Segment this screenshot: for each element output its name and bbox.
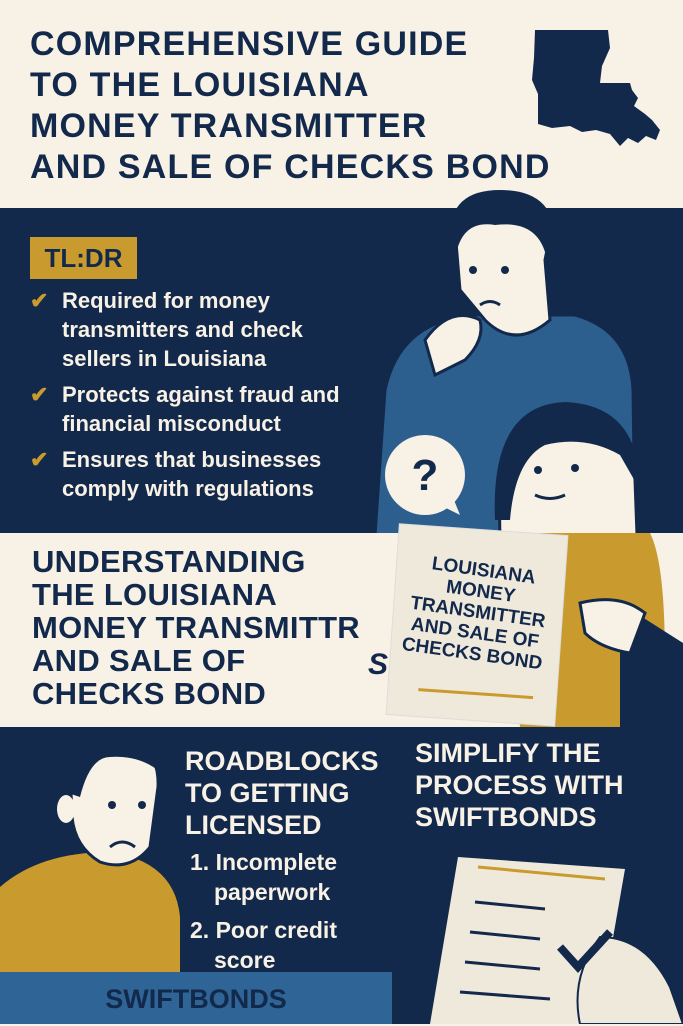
document: bond — [387, 524, 567, 726]
heading: understanding: UNDERSTANDING — [32, 544, 306, 579]
illustration: woman sweater and hand — [520, 533, 683, 727]
heading: roadblocks — [185, 746, 378, 840]
title: COMPREHENSIVE GUIDE — [30, 25, 468, 63]
icon: question bubble: ? — [412, 451, 438, 500]
title: MONEY TRANSMITTER — [30, 107, 428, 145]
title: AND SALE OF CHECKS BOND — [30, 148, 551, 186]
heading: understanding — [32, 544, 360, 711]
heading: simplify: PROCESS WITH — [415, 770, 624, 800]
heading: simplify: SWIFTBONDS — [415, 802, 596, 832]
panel: roadblocks — [0, 727, 683, 1024]
heading: roadblocks: ROADBLOCKS — [185, 746, 378, 776]
list: roadblocks: paperwork — [214, 879, 330, 905]
doc title: MONEY — [445, 576, 517, 607]
illustration: sad man — [0, 756, 180, 972]
heading: understanding: AND SALE OF — [32, 643, 245, 678]
text: stray S: S — [368, 648, 388, 681]
panel: TL:DR — [0, 208, 683, 533]
checklist: Required for money transmitters and check sellers in Louisiana — [62, 288, 303, 371]
heading: simplify: SIMPLIFY THE — [415, 738, 601, 768]
heading: simplify — [415, 738, 624, 832]
list: roadblocks: 2. Poor credit — [190, 917, 337, 943]
panel: understanding — [0, 533, 683, 727]
title: TO THE LOUISIANA — [30, 66, 370, 104]
heading: roadblocks: LICENSED — [185, 810, 322, 840]
checklist — [30, 288, 340, 501]
panel: title band — [0, 0, 683, 208]
checklist: ✔ — [30, 288, 48, 313]
title — [30, 25, 551, 186]
checklist: ✔ — [30, 447, 48, 472]
doc title: CHECKS BOND — [401, 634, 544, 674]
heading: understanding: THE LOUISIANA — [32, 577, 277, 612]
heading: understanding: CHECKS BOND — [32, 676, 266, 711]
checklist: Protects against fraud and financial misconduct — [62, 382, 340, 436]
badge: TL:DR — [30, 237, 137, 279]
doc title — [401, 553, 547, 674]
icon: question bubble — [385, 435, 465, 515]
footer: SWIFTBONDS: SWIFTBONDS — [105, 984, 287, 1014]
heading: understanding: MONEY TRANSMITTR — [32, 610, 360, 645]
doc title: AND SALE OF — [410, 614, 540, 653]
footer: SWIFTBONDS — [0, 972, 392, 1024]
heading: roadblocks: TO GETTING — [185, 778, 350, 808]
list: roadblocks — [190, 849, 337, 973]
icon: Louisiana map — [532, 30, 660, 146]
checklist: ✔ — [30, 382, 48, 407]
doc title: TRANSMITTER — [409, 593, 547, 632]
doc title: LOUISIANA — [431, 553, 537, 589]
checklist: Ensures that businesses comply with regulations — [62, 447, 321, 501]
list: roadblocks: score — [214, 947, 275, 973]
illustration: thinking man and woman — [376, 190, 636, 533]
badge: TL:DR: TL:DR — [44, 243, 122, 273]
list: roadblocks: 1. Incomplete — [190, 849, 337, 875]
illustration: checklist document with hand — [430, 857, 682, 1024]
